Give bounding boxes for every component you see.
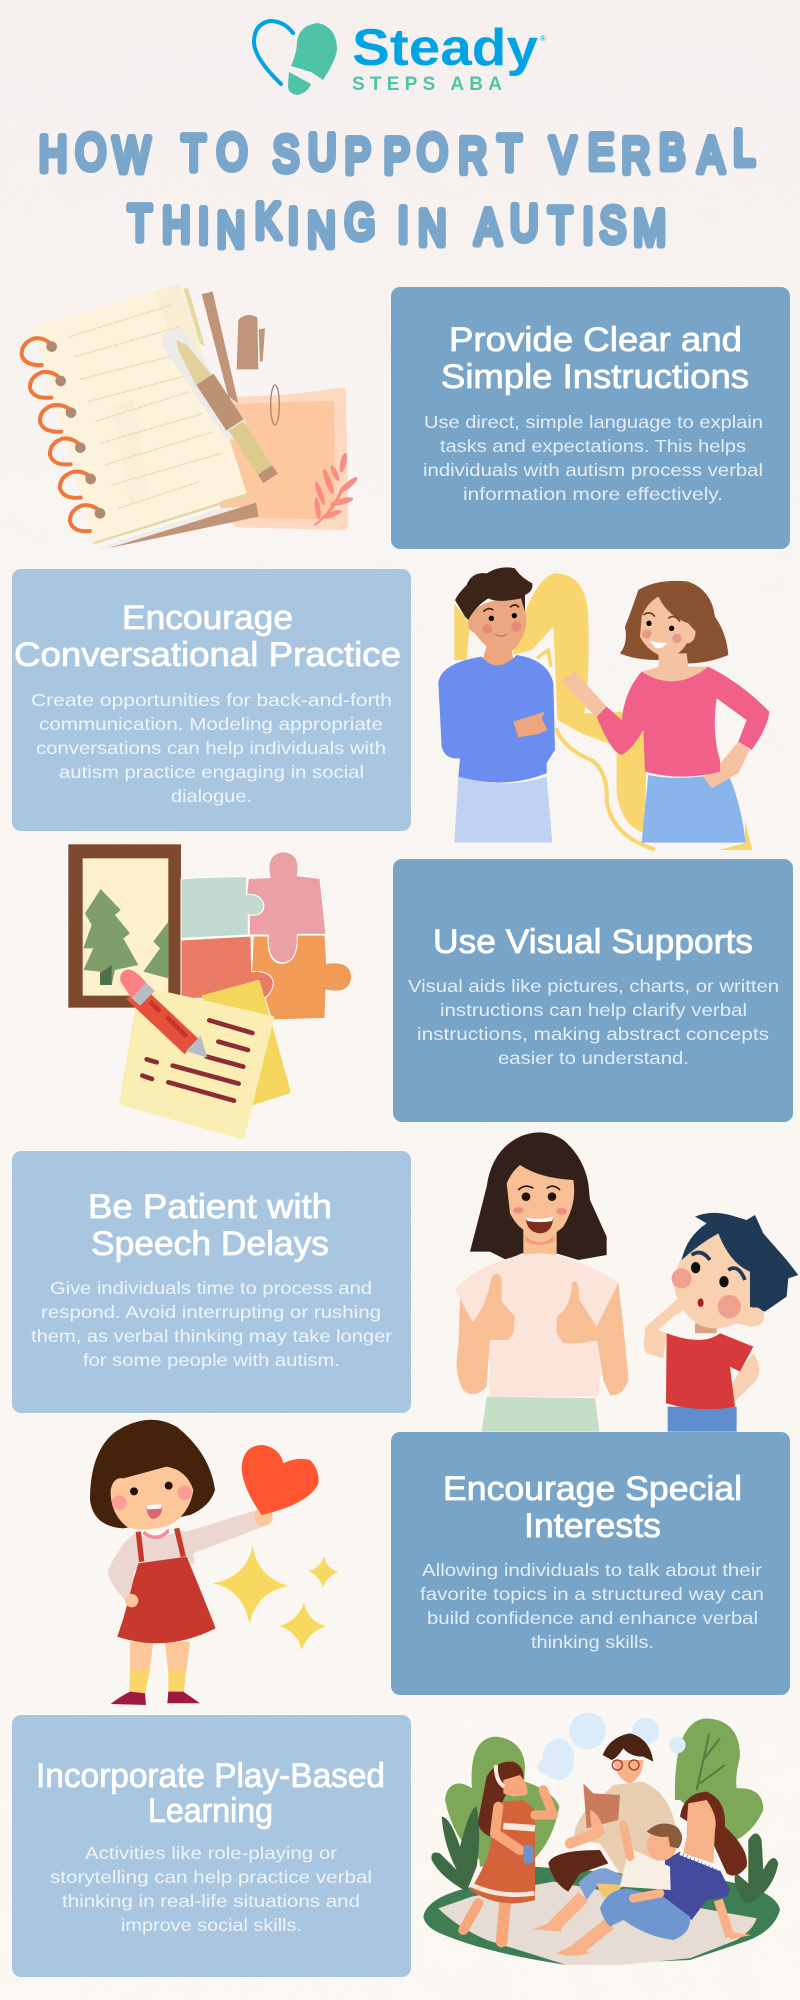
heading: Simple Instructions — [441, 358, 749, 396]
panel: Incorporate Play-Based Learning — [12, 1715, 411, 1977]
title — [39, 119, 755, 258]
heading: Conversational Practice — [14, 636, 401, 674]
puzzle pieces — [181, 852, 352, 1020]
heading: Provide Clear and — [449, 321, 742, 359]
body text — [408, 976, 779, 1068]
body text: storytelling can help practice verbal — [50, 1867, 372, 1887]
body text — [423, 412, 763, 504]
panel: Encourage Conversational Practice — [12, 569, 411, 831]
body text: Allowing individuals to talk about their — [422, 1560, 762, 1580]
woman — [562, 581, 769, 843]
heading — [88, 1188, 332, 1263]
body text: favorite topics in a structured way can — [420, 1584, 764, 1604]
boy — [644, 1213, 798, 1432]
heading: Interests — [524, 1507, 661, 1545]
body text: individuals with autism process verbal — [423, 460, 763, 480]
pencil — [120, 969, 207, 1058]
logo tagline: STEPS ABA — [352, 74, 502, 95]
heading — [443, 1470, 742, 1545]
body text: Use direct, simple language to explain — [424, 412, 763, 432]
body text — [31, 690, 392, 806]
body text: autism practice engaging in social — [59, 762, 364, 782]
body text: tasks and expectations. This helps — [440, 436, 746, 456]
heading: Use Visual Supports — [433, 923, 753, 961]
body text — [31, 1278, 392, 1370]
illustration: woman giving thumbs up and thinking boy — [455, 1132, 798, 1432]
heading — [14, 599, 401, 674]
panel: Use Visual Supports — [393, 859, 793, 1122]
body text: Visual aids like pictures, charts, or written — [408, 976, 779, 996]
illustration: picture frame, puzzle and sticky notes — [68, 844, 352, 1138]
logo wordmark: Steady — [352, 19, 538, 77]
illustration: family reading on picnic blanket — [423, 1713, 780, 1965]
heading: Be Patient with — [88, 1188, 332, 1226]
body text: Create opportunities for back-and-forth — [31, 690, 392, 710]
body text: dialogue. — [171, 786, 252, 806]
body text: Activities like role-playing or — [85, 1843, 337, 1863]
body text: them, as verbal thinking may take longer — [31, 1326, 392, 1346]
icon: footprint — [288, 23, 337, 95]
illustration: girl holding heart with sparkles — [90, 1420, 338, 1705]
body text: communication. Modeling appropriate — [39, 714, 383, 734]
body text: instructions can help clarify verbal — [440, 1000, 747, 1020]
heading — [36, 1757, 385, 1830]
body text: Give individuals time to process and — [50, 1278, 372, 1298]
heading: Encourage — [122, 599, 293, 637]
registered mark: ® — [540, 34, 546, 43]
body text: instructions, making abstract concepts — [417, 1024, 769, 1044]
girl blowing bubbles — [463, 1762, 553, 1942]
logo: Steady Steps ABA — [254, 19, 546, 95]
body text: build confidence and enhance verbal — [427, 1608, 758, 1628]
heading: Encourage Special — [443, 1470, 742, 1508]
title: HOW TO SUPPORT VERBAL — [39, 119, 755, 184]
body text: for some people with autism. — [83, 1350, 340, 1370]
body text: thinking skills. — [531, 1632, 654, 1652]
illustration: man and woman talking — [438, 567, 769, 850]
heading: Incorporate Play-Based — [36, 1757, 385, 1795]
woman — [455, 1132, 628, 1432]
panel: Be Patient with Speech Delays — [12, 1151, 411, 1413]
body text — [50, 1843, 372, 1935]
body text: conversations can help individuals with — [36, 738, 386, 758]
illustration: notebook, pen and notes — [22, 284, 359, 551]
body text: easier to understand. — [498, 1048, 689, 1068]
heading: Speech Delays — [91, 1225, 329, 1263]
title: THINKING IN AUTISM — [128, 192, 666, 258]
boy — [533, 1823, 690, 1956]
body text: thinking in real-life situations and — [62, 1891, 360, 1911]
icon: heart outline — [254, 21, 293, 84]
heading — [441, 321, 749, 396]
father — [548, 1733, 680, 1892]
body text: respond. Avoid interrupting or rushing — [41, 1302, 381, 1322]
body text: improve social skills. — [121, 1915, 302, 1935]
body text — [420, 1560, 764, 1652]
body text: information more effectively. — [463, 484, 723, 504]
panel: Provide Clear and Simple Instructions — [391, 287, 790, 549]
mother — [663, 1792, 752, 1939]
heading: Learning — [148, 1792, 273, 1830]
man — [438, 567, 555, 843]
panel: Encourage Special Interests — [391, 1432, 790, 1695]
